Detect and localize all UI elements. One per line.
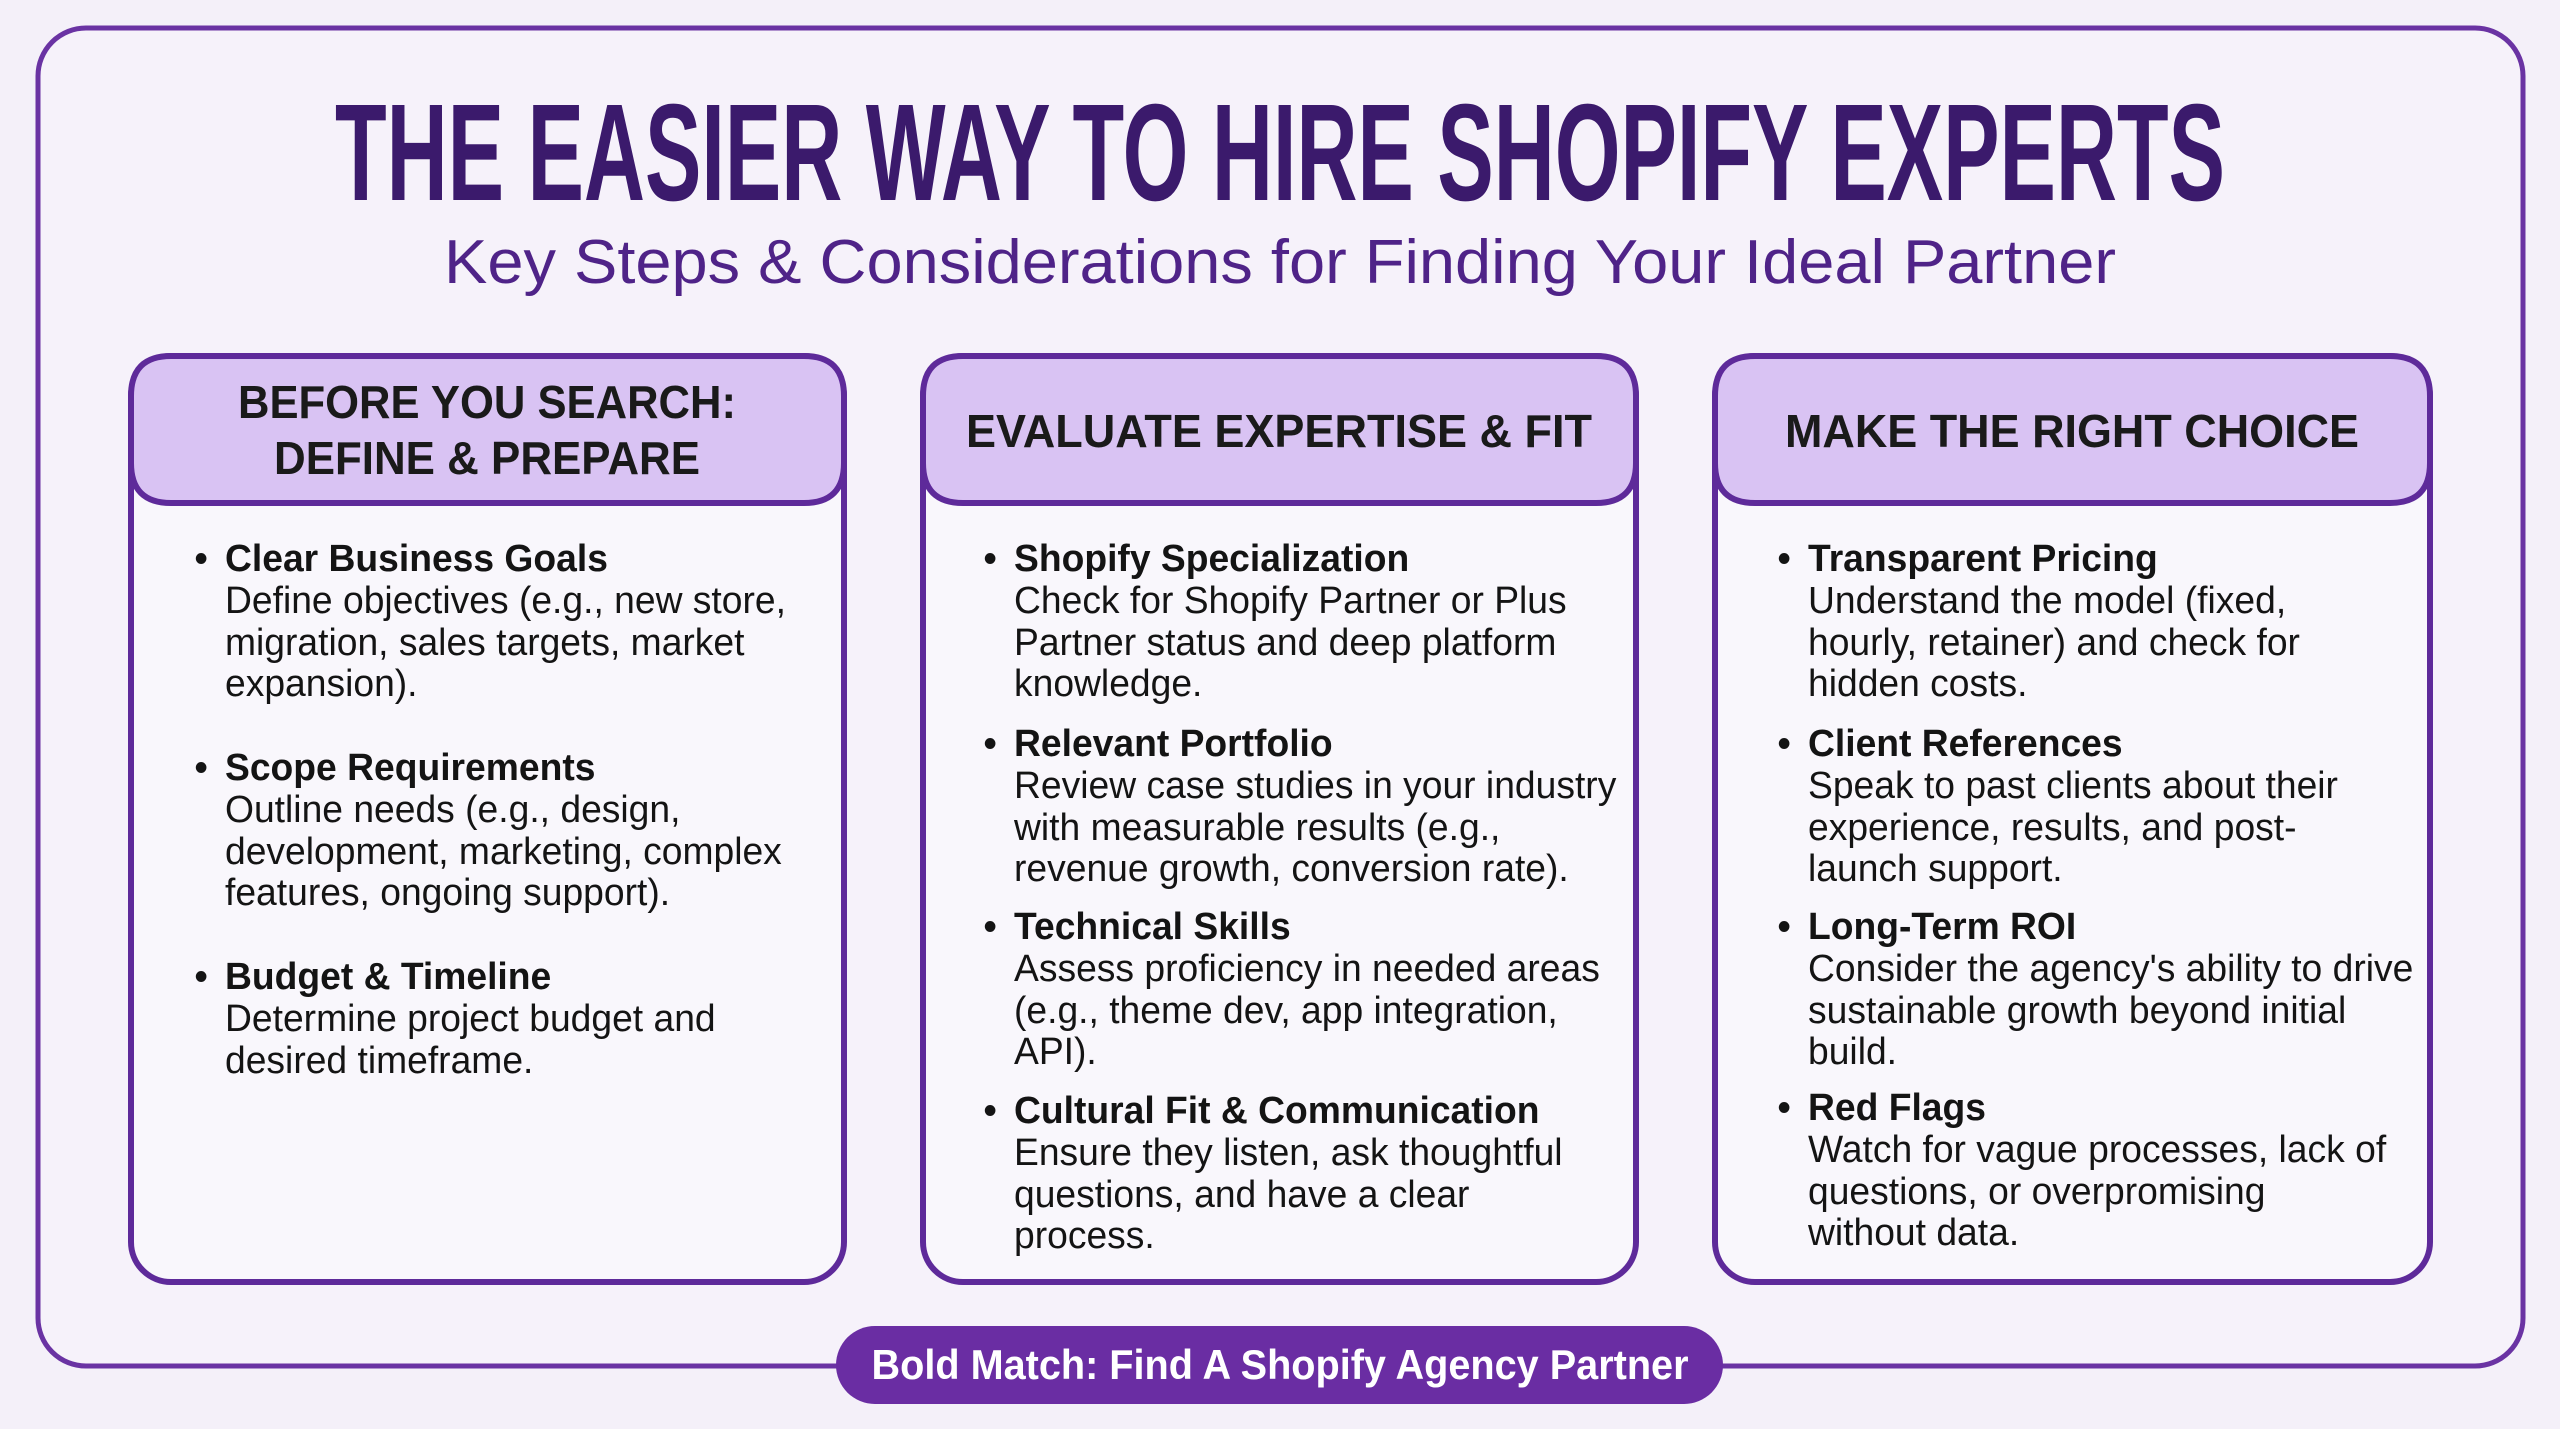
panel: evaluate expertise (923, 356, 1636, 1282)
item: portfolio: revenue growth, conversion rate). (1014, 848, 1569, 890)
badge: Bold Match: Find A Shopify Agency Partner (872, 1341, 1688, 1388)
subtitle: Key Steps & Considerations for Finding Your Ideal Partner (444, 228, 2116, 297)
item: clear business goals: migration, sales targets, market (225, 622, 744, 664)
panel 2 items (984, 538, 1616, 1257)
item: pricing: hourly, retainer) and check for (1808, 622, 2300, 664)
text: • (984, 538, 997, 580)
item: clear business goals (195, 538, 786, 705)
item: ROI: Long-Term ROI (1808, 906, 2076, 948)
panel: right choice: MAKE THE RIGHT CHOICE (1785, 405, 2359, 457)
item: cultural fit (984, 1090, 1563, 1257)
item: scope requirements: development, marketing, complex (225, 831, 782, 873)
item: ROI: Consider the agency's ability to drive (1808, 948, 2413, 990)
item: red flags: questions, or overpromising (1808, 1171, 2265, 1213)
item: portfolio: Review case studies in your industry (1014, 765, 1616, 807)
panel: evaluate expertise: EVALUATE EXPERTISE & FIT (966, 405, 1592, 457)
panel: define & prepare: DEFINE & PREPARE (274, 432, 700, 484)
item: cultural fit: questions, and have a clear (1014, 1174, 1469, 1216)
item: references: Speak to past clients about their (1808, 765, 2338, 807)
text: • (1778, 723, 1791, 765)
text: • (1778, 906, 1791, 948)
item: red flags: without data. (1808, 1212, 2019, 1254)
item: pricing (1778, 538, 2300, 705)
item: pricing: Transparent Pricing (1808, 538, 2158, 580)
item: technical skills: Technical Skills (1014, 906, 1291, 948)
item: clear business goals: Clear Business Goals (225, 538, 608, 580)
item: technical skills: Assess proficiency in needed areas (1014, 948, 1600, 990)
item: budget: Budget & Timeline (225, 956, 551, 998)
item: specialization (984, 538, 1567, 705)
item: budget: Determine project budget and (225, 998, 716, 1040)
item: clear business goals: expansion). (225, 663, 418, 705)
panel: define & prepare (131, 356, 844, 1282)
panel 1 items (195, 538, 786, 1082)
item: references: experience, results, and post- (1808, 807, 2297, 849)
item: cultural fit: Ensure they listen, ask thoughtful (1014, 1132, 1563, 1174)
item: cultural fit: process. (1014, 1215, 1155, 1257)
item: red flags: Red Flags (1808, 1087, 1986, 1129)
item: clear business goals: Define objectives (e.g., new store, (225, 580, 786, 622)
item: specialization: Shopify Specialization (1014, 538, 1409, 580)
item: references: Client References (1808, 723, 2123, 765)
item: red flags (1778, 1087, 2386, 1254)
item: specialization: Check for Shopify Partner or Plus (1014, 580, 1567, 622)
item: budget (195, 956, 716, 1082)
text: • (984, 906, 997, 948)
item: scope requirements: features, ongoing support). (225, 872, 670, 914)
item: portfolio: with measurable results (e.g., (1014, 807, 1500, 849)
item: references (1778, 723, 2338, 890)
item: references: launch support. (1808, 848, 2063, 890)
item: portfolio (984, 723, 1616, 890)
panel: right choice (1715, 356, 2430, 1282)
item: ROI: sustainable growth beyond initial (1808, 990, 2346, 1032)
item: budget: desired timeframe. (225, 1040, 533, 1082)
item: specialization: knowledge. (1014, 663, 1202, 705)
item: red flags: Watch for vague processes, lack of (1808, 1129, 2386, 1171)
item: ROI (1778, 906, 2413, 1073)
item: portfolio: Relevant Portfolio (1014, 723, 1333, 765)
text: • (1778, 538, 1791, 580)
item: scope requirements: Outline needs (e.g., design, (225, 789, 680, 831)
badge (836, 1326, 1723, 1404)
panel: define & prepare: BEFORE YOU SEARCH: (238, 376, 736, 428)
text: • (1778, 1087, 1791, 1129)
text: • (984, 723, 997, 765)
text: • (195, 747, 208, 789)
text: • (195, 538, 208, 580)
panel 3 items (1778, 538, 2413, 1254)
item: technical skills (984, 906, 1600, 1073)
item: scope requirements (195, 747, 782, 914)
item: pricing: hidden costs. (1808, 663, 2027, 705)
item: scope requirements: Scope Requirements (225, 747, 595, 789)
text: • (984, 1090, 997, 1132)
text: • (195, 956, 208, 998)
item: technical skills: API). (1014, 1031, 1097, 1073)
item: specialization: Partner status and deep platform (1014, 622, 1556, 664)
item: cultural fit: Cultural Fit & Communication (1014, 1090, 1539, 1132)
item: ROI: build. (1808, 1031, 1897, 1073)
item: technical skills: (e.g., theme dev, app integration, (1014, 990, 1558, 1032)
item: pricing: Understand the model (fixed, (1808, 580, 2286, 622)
